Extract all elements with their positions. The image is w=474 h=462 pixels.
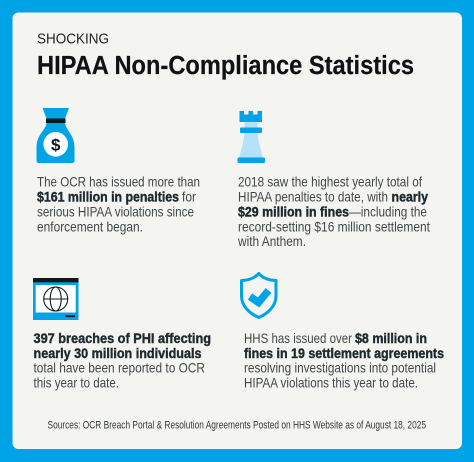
- text block: penalties: [37, 174, 200, 234]
- text block: breaches: [34, 331, 211, 390]
- text block: 2018 record: HIPAA penalties to date, with: [238, 190, 388, 204]
- text block: settlements: fines in 19 settlement agreements: [244, 346, 444, 361]
- text block: breaches: this year to date.: [34, 376, 119, 390]
- text block: breaches: 397 breaches of PHI affecting: [34, 331, 211, 346]
- text block: 2018 record: record-setting $16 million settlement: [238, 220, 430, 234]
- text block: penalties: $161 million in penalties: [37, 190, 179, 204]
- text block: 2018 record: nearly: [392, 190, 428, 204]
- eyebrow: SHOCKING: SHOCKING: [37, 32, 109, 48]
- text block: 2018 record: [237, 174, 430, 249]
- title: HIPAA Non-Compliance Statistics: [37, 52, 414, 80]
- text block: breaches: total have been reported to OCR: [34, 360, 205, 376]
- text block: breaches: nearly 30 million individuals: [34, 346, 202, 361]
- text block: penalties: serious HIPAA violations since: [37, 204, 194, 220]
- text block: settlements: HIPAA violations this year to date.: [244, 376, 418, 390]
- text block: penalties: The OCR has issued more than: [37, 174, 200, 190]
- text block: settlements: HHS has issued over: [244, 331, 352, 346]
- icon: money bag: [36, 108, 74, 163]
- icon: money bag: $: [51, 136, 61, 154]
- icon: browser window with globe: [33, 278, 78, 320]
- text block: 2018 record: —including the: [349, 204, 427, 220]
- text block: settlements: $8 million in: [355, 331, 427, 346]
- text block: settlements: [244, 331, 444, 390]
- text block: settlements: resolving investigations into potential: [244, 360, 436, 376]
- text block: penalties: for: [182, 190, 196, 204]
- text block: 2018 record: with Anthem.: [237, 234, 306, 249]
- text block: 2018 record: 2018 saw the highest yearly total of: [238, 174, 422, 190]
- text block: 2018 record: $29 million in fines: [238, 204, 349, 220]
- icon: shield with check: [242, 274, 276, 318]
- text block: penalties: enforcement began.: [37, 220, 143, 234]
- icon: chess rook: [238, 111, 265, 163]
